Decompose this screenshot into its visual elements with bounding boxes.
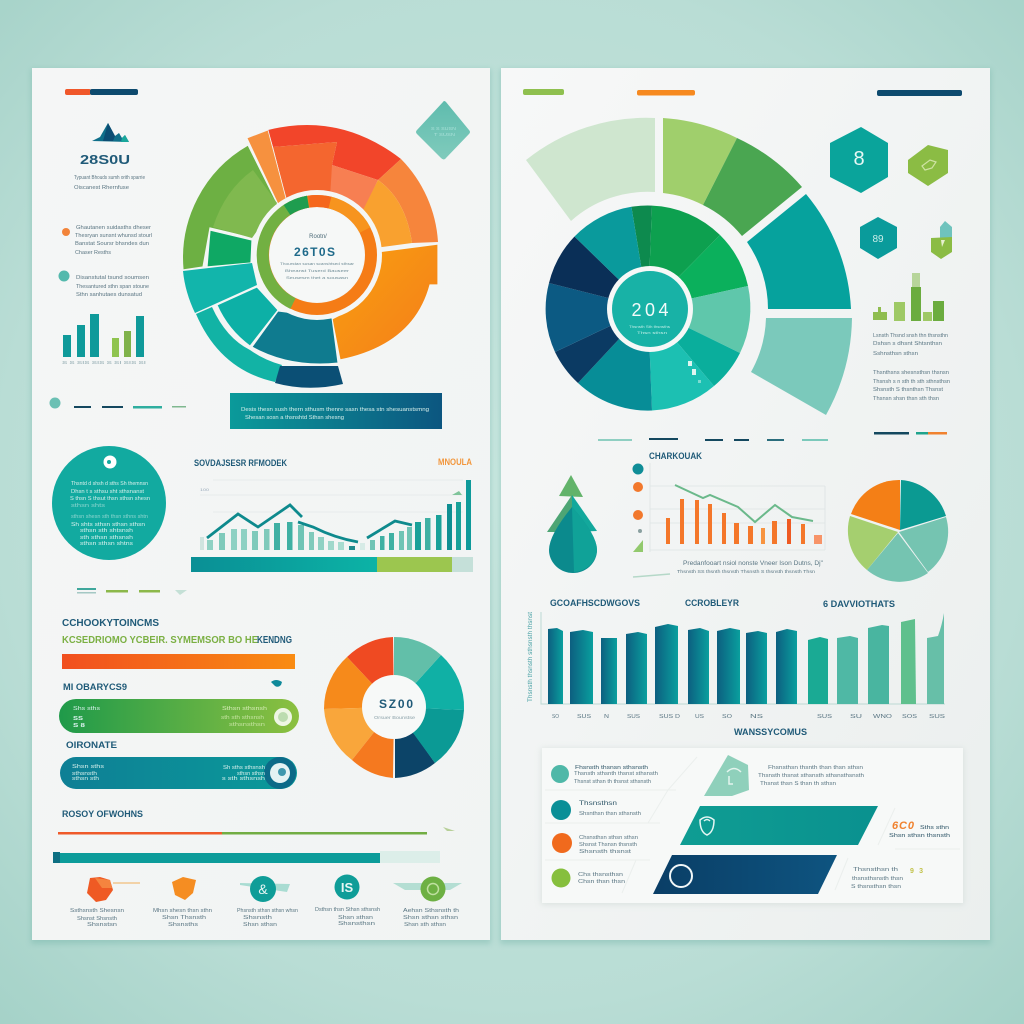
badge: teal circle: sthsn sth shtsnsh <box>80 528 133 534</box>
step 4: Shsn sthsn <box>338 915 373 921</box>
banner: caption left: Shesan sosn a thsnshtd Sthsn shesng <box>245 415 344 421</box>
step 4 <box>315 874 380 927</box>
row 2: Thsnsthsn <box>579 801 617 807</box>
badge: teal circle: Sh shts sthsn sthsn sthsn <box>71 522 145 528</box>
chart: orange bars with line <box>632 451 825 577</box>
icon: green tag with teal top <box>931 221 952 259</box>
callout: teal bullet: Sthn sanhutaes dunsatud <box>76 292 142 298</box>
donut chart: main left <box>182 125 438 388</box>
pill: teal: s sth sthsnsh <box>222 776 265 782</box>
heading: section: CCHOOKYTOINCMS <box>62 618 159 629</box>
badge: teal circle: sthsn shts <box>71 503 106 509</box>
small marks <box>688 361 701 383</box>
row 4: Chs thsnsthsn <box>578 872 623 878</box>
pill: teal: Shsn sths <box>72 764 105 770</box>
axis labels: WNO <box>873 714 892 720</box>
heading: left stat: 28S0U <box>80 152 130 167</box>
row 1 <box>551 765 658 785</box>
top accent bars right <box>523 89 962 96</box>
axis labels: SO <box>552 714 559 720</box>
outer arc segments <box>526 118 852 415</box>
step 3: Shsnsth <box>243 915 272 921</box>
step 5: Shsn sthsn sthsn <box>403 915 458 921</box>
heading: bottom right: WANSSYCOMUS <box>734 727 807 737</box>
text block: right notes: Shsnsth S thsnthsn Thsnst <box>873 387 944 393</box>
icon: mountain <box>92 123 129 142</box>
panel: process box <box>541 748 964 905</box>
pie chart: main right <box>546 206 750 411</box>
axis labels: SUS D <box>659 714 681 720</box>
callout: orange value <box>889 820 950 839</box>
badge: teal circle <box>52 446 166 560</box>
section headings: bar chart <box>550 598 895 609</box>
donut centre value: SZ00 <box>379 697 413 711</box>
pill: green: SS <box>73 716 84 722</box>
callout: teal bullet <box>58 270 149 298</box>
text block: upper middle: Thsnst thsn S thsn th sthsn <box>760 781 836 787</box>
pie chart: small right <box>848 480 948 582</box>
icon row: five steps <box>70 874 462 928</box>
step 1: Shsnstsn <box>87 922 117 928</box>
axis labels: NS <box>750 714 764 720</box>
text block: right notes: Dshsn s dhsnt Shtsnthsn <box>873 341 942 347</box>
row 1: Thsnsth sthsnth thsnst sthsnsth <box>574 771 658 777</box>
badge: teal circle: S thsn S thsut thsn sthsn shesn <box>70 496 150 502</box>
pill: teal: sthsnsth <box>72 771 97 777</box>
panel: left sheet <box>31 68 491 944</box>
icon: teal diamond: S S SUSN <box>431 126 456 131</box>
step 5: Shsn sth sthsn <box>404 922 446 928</box>
pill: teal <box>60 757 297 789</box>
step 3: Phsnsth sthsn sthsn whsn <box>237 908 298 914</box>
parallelogram: navy <box>653 855 837 894</box>
donut chart: lower left <box>324 637 464 778</box>
text block: right notes <box>873 333 950 402</box>
step 3: Shsn sthsn <box>243 922 277 928</box>
callout: orange bullet <box>62 225 152 256</box>
text block: right notes: Lsnsth Thsnd snsh thn thsnsthn <box>873 333 948 339</box>
bar chart: wide teal: Thsnsth thsnsth sthsnsth thsnst <box>528 612 534 702</box>
badge: teal circle: sthsn sthsn shtns <box>80 541 134 547</box>
donut centre text: Bheanst Tuserd Bauseer <box>285 269 350 273</box>
donut centre value <box>374 697 416 720</box>
axis labels: N <box>604 714 610 720</box>
row 3: Chsnsthsn sthsn sthsn <box>579 835 638 841</box>
legend dashes middle <box>77 588 187 595</box>
bar chart: small left: S S SIS SIS S SI SIS SI <box>62 360 146 365</box>
light bars <box>808 613 944 704</box>
section headings: bar chart: CCROBLEYR <box>685 598 739 608</box>
chart: trend bars and line <box>194 457 472 550</box>
text block: intro <box>74 175 145 191</box>
donut centre text: 26T0S <box>294 245 335 259</box>
axis labels: SO <box>722 714 732 720</box>
orange bars <box>666 499 822 544</box>
pill: teal: sthsn sth <box>72 776 99 782</box>
badge: teal circle: Thsntd d shsh d sths Sh themnsn <box>71 481 148 487</box>
icon: pale teal shape <box>704 755 749 796</box>
text block: intro: Typuant Bhouds sumh orith sparrie <box>74 175 145 181</box>
icon: green shield <box>908 145 948 186</box>
chart caption: Thsnsth SS thsnth thsnsth Thsnsth S thsnsth thsnsth Thsn <box>677 569 816 574</box>
row 3: Shsnsth thsnst <box>579 849 632 855</box>
row 2 <box>551 800 641 820</box>
pill: green: sth sth sthsnsh <box>221 715 264 721</box>
callout: orange bullet: Banstat Soursr bhsndes dun <box>75 241 149 247</box>
chart caption <box>677 561 823 574</box>
callout: lower value: Thsnsthsn th <box>853 867 898 873</box>
callout: lower value: S thsnsthsn thsn <box>851 884 901 890</box>
text block: right notes: Sshnsthsn sthsn <box>873 351 918 357</box>
pie centre text: Thsn sthsn <box>637 331 667 335</box>
icon: teal diamond: T SUSN <box>434 132 455 137</box>
subheading: green: KCSEDRIOMO YCBEIR. SYMEMSOR BO HE <box>62 635 258 646</box>
step 1: Ssthsnsth Shesnsn <box>70 908 124 914</box>
panel: right sheet <box>500 68 991 944</box>
axis labels: US <box>695 714 705 720</box>
bars <box>200 480 471 550</box>
timeline line <box>58 827 455 834</box>
bar: orange <box>62 654 295 669</box>
callout: lower value <box>851 867 923 890</box>
parallelogram: teal <box>680 806 878 845</box>
icon: teal hexagon: 8 <box>853 148 865 170</box>
step 5: Aehsn Sthsnsth th <box>403 908 459 914</box>
pill: teal: Sh sths sthsnsh <box>223 765 265 771</box>
icon: small teal hexagon: 89 <box>872 234 884 245</box>
text block: intro: Oiscanest Rhernfuse <box>74 185 129 191</box>
callout: orange bullet: Chaser Resths <box>75 250 112 256</box>
callout: orange value: Shsn sthsn thsnsth <box>889 833 950 839</box>
row 1: Thsnst sthsn th thsnst sthsnsth <box>574 779 651 785</box>
chart heading accent: MNOULA <box>438 457 472 467</box>
section headings: bar chart: 6 DAVVIOTHATS <box>823 599 895 609</box>
step 1: Shsnst Shsnsth <box>77 916 117 922</box>
axis labels: SOS <box>902 714 918 720</box>
callout: orange bullet: Ghautanen suidasths dheser <box>76 225 151 231</box>
donut centre text: Rootn/ <box>309 234 327 240</box>
pill: green: Shs sths <box>73 706 101 712</box>
step 2: Shsnsths <box>168 922 199 928</box>
legend dashes right <box>598 432 947 441</box>
bar chart: small green <box>873 273 944 321</box>
donut centre text <box>280 234 355 280</box>
badge: teal circle: sth sthsn sthsnsh <box>80 535 133 541</box>
progress bar: teal <box>53 851 440 863</box>
callout: lower value: thsnsthsnsth thsn <box>852 876 903 882</box>
axis labels: SUS <box>929 714 946 720</box>
text block: right notes: Thsnsn shsn thsn sth thsn <box>873 396 939 402</box>
row 4 <box>552 868 625 888</box>
heading: bottom left: ROSOY OFWOHNS <box>62 809 143 819</box>
donut centre text: Thourstan susan scanshtsed sthsar <box>280 262 355 266</box>
callout: lower value: 9 3 <box>910 868 923 875</box>
bar chart: small left <box>62 314 146 365</box>
chart legend markers <box>632 464 644 552</box>
callout: orange value: 6C0 <box>892 820 915 832</box>
icon: small bird <box>271 680 282 687</box>
text block: right notes: Thsnthsns shesnsthsn thsnsn <box>873 370 949 376</box>
icon: teal hexagon <box>830 127 888 193</box>
pill: green <box>59 699 299 733</box>
icon: small teal hexagon <box>860 217 897 259</box>
step 2: Mhsn shesn thsn sthn <box>153 908 212 914</box>
badge: teal circle: sthsn shesn sth thsn sthns shtn <box>71 514 148 520</box>
axis labels <box>552 714 946 720</box>
row 2: Shsnthsn thsn sthsnsth <box>579 811 641 817</box>
row 3 <box>552 833 638 855</box>
donut centre value: Orsuer Bounstse <box>374 715 416 720</box>
label: second pill: OIRONATE <box>66 740 117 750</box>
text block: upper middle: Thsnsth thsnst sthsnsth sthsnsthsnsth <box>758 773 864 779</box>
text block: right notes: Thsnsh s n sth th sth sthnsthsn <box>873 379 950 385</box>
step 2 <box>153 877 212 928</box>
step 2: Shsn Thsnsth <box>162 915 206 921</box>
stacked progress bar <box>191 557 473 572</box>
step 4: Shsnsthsn <box>338 921 375 927</box>
donut centre text: Seusesm thet a sousasn <box>286 276 348 280</box>
teal bars <box>548 624 797 704</box>
callout: orange value: Sths sthn <box>920 825 949 831</box>
pill: green: S 8 <box>73 723 85 729</box>
legend dashes left <box>50 398 186 408</box>
callout: teal bullet: Disanstutal tsund soumsen <box>76 275 149 281</box>
callout: teal bullet: Thesantured sthn span stoune <box>76 284 149 290</box>
row 1: Fhsnsth thsnsn sthsnsth <box>575 765 648 771</box>
banner: caption left: Desis thesn sush thern sthusm thenre sasn thesa stn shesuanstsmng <box>241 407 429 413</box>
row 3: Shsnst Thsnsn thsnsth <box>579 842 637 848</box>
subheading: green: KENDNG <box>257 635 292 646</box>
pill: green: Sthsn sthsnsh <box>222 706 267 712</box>
step 3: & <box>258 881 268 897</box>
step 4: Dsthsn thsn Sthsn sthsnsh <box>315 907 380 913</box>
row 4: Chsn thsn thsn <box>578 879 625 885</box>
text block: upper middle: Fhsnsthsn thsnth thsn thsn sthsn <box>768 765 863 771</box>
pie centre text <box>629 300 670 335</box>
step 1 <box>70 877 140 928</box>
section headings: bar chart: GCOAFHSCDWGOVS <box>550 598 640 608</box>
pill: green: sthsnsthsn <box>229 722 265 728</box>
axis labels: SUS <box>817 714 833 720</box>
pie centre text: 204 <box>632 300 668 320</box>
green trend line <box>675 485 813 522</box>
top accent bar left <box>65 89 138 95</box>
step 5 <box>393 876 462 928</box>
callout: orange bullet: Thesryan sunsnt whunsd stourl <box>75 233 152 239</box>
chart: trend bars and line: 100 <box>200 487 210 492</box>
label: first pill: MI OBARYCS9 <box>63 682 127 692</box>
chart heading: CHARKOUAK <box>649 451 702 461</box>
axis labels: SUS <box>627 714 641 720</box>
pill: teal: sthsn sthsn <box>237 771 265 777</box>
axis labels: SUS <box>577 714 592 720</box>
step 4: IS <box>341 880 353 895</box>
icon: tree drop <box>547 475 597 573</box>
chart heading: SOVDAJSESR RFMODEK <box>194 458 287 468</box>
text block: upper middle <box>758 765 864 787</box>
chart caption: Predanfooart nsiol nonste Vneer Ison Dutns, Dj" <box>683 561 823 567</box>
line <box>207 505 412 542</box>
banner: caption left <box>230 393 442 429</box>
icon: teal diamond <box>416 101 470 160</box>
step 3 <box>237 876 298 928</box>
bar chart: wide teal <box>528 612 946 720</box>
axis labels: SU <box>850 714 863 720</box>
badge: teal circle: Dhsn t s sthsu sht sthsnanst <box>71 489 145 495</box>
pie centre text: Thsnsth Sth thsnsths <box>629 325 670 329</box>
